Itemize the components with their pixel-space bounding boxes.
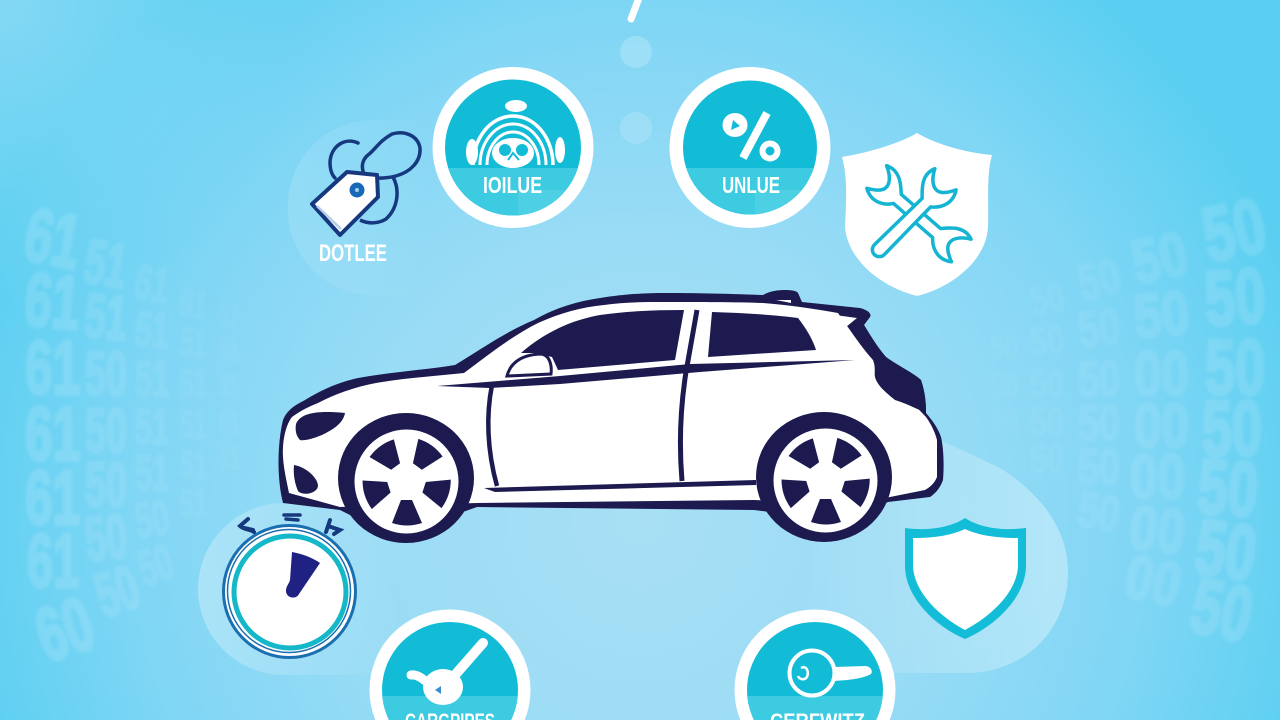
right number wall: 50: [1078, 351, 1120, 407]
left number wall: 61: [25, 456, 80, 541]
left number wall: 51: [79, 227, 132, 302]
left number wall: 50: [85, 451, 127, 520]
right number wall: 50: [990, 330, 1018, 366]
left number wall: 51: [218, 368, 240, 404]
right number wall: 00: [1130, 443, 1185, 512]
right number wall: 50: [1072, 247, 1126, 311]
car outer silhouette: [278, 290, 944, 520]
icon: price tag: [312, 133, 420, 235]
rear wheel: [756, 412, 892, 542]
left number wall: 61: [18, 192, 87, 286]
illustration: hatchback car: [278, 290, 944, 543]
right number wall: 50: [1131, 279, 1192, 352]
left number wall: 51: [180, 443, 207, 487]
badge: hammer tool: [370, 610, 530, 720]
panel: soft backdrop behind stopwatch: [198, 503, 458, 675]
badge: value ring: [432, 67, 594, 228]
right number wall: 00: [1134, 392, 1189, 461]
left number wall: 61: [176, 280, 211, 328]
left number wall: 50: [82, 502, 131, 575]
wrench one: [864, 164, 972, 265]
spoiler highlight: [835, 315, 857, 327]
connector dot lower: [620, 112, 652, 144]
wrench two: [861, 168, 959, 266]
left number wall: 51: [218, 405, 240, 441]
right number wall: 50: [1075, 298, 1123, 358]
front wheel: [338, 413, 474, 543]
left number wall: 51: [135, 399, 169, 455]
left number wall: 51: [178, 320, 209, 366]
icon: rings and face: [466, 100, 565, 168]
rear side window: [708, 312, 816, 357]
icon: stopwatch: [224, 515, 356, 658]
connector dot upper: [620, 36, 652, 68]
left number wall: 61: [214, 295, 244, 335]
label: value: IOILUE: [483, 172, 542, 198]
right number wall: 50: [990, 368, 1018, 404]
left number wall: 51: [135, 445, 169, 501]
icon: key: [790, 650, 872, 696]
tail light: [851, 325, 926, 413]
panel: soft backdrop behind shield: [780, 440, 1068, 673]
left number wall: 51: [218, 440, 240, 476]
left number wall: 51: [218, 332, 240, 368]
right number wall: 50: [1025, 274, 1069, 324]
headlight: [296, 412, 345, 440]
left number wall: 51: [135, 351, 169, 407]
front door edge: [488, 385, 497, 486]
right number wall: 00: [1134, 340, 1189, 409]
right number wall: 50: [990, 402, 1018, 438]
left number wall: 60: [25, 581, 104, 679]
left number wall: 50: [131, 489, 173, 549]
label: tag: DOTLEE: [319, 240, 387, 267]
right number wall: 50: [1030, 362, 1064, 406]
fog light: [294, 465, 318, 494]
right number wall: 50: [1030, 437, 1064, 481]
front side window: [521, 310, 684, 370]
belt line: [437, 360, 855, 388]
right number wall: 50: [1126, 219, 1194, 298]
left number wall: 61: [25, 392, 80, 477]
car white body: [283, 302, 937, 507]
mirror: [507, 354, 551, 376]
roof fin highlight: [776, 300, 791, 303]
left number wall: 50: [87, 553, 148, 631]
left number wall: 51: [133, 301, 171, 359]
right number wall: 50: [1028, 317, 1066, 365]
right number wall: 50: [1074, 481, 1124, 543]
left number wall: 50: [85, 340, 127, 409]
left number wall: 50: [85, 397, 127, 466]
left number wall: 61: [21, 257, 83, 346]
badge: percent: [670, 67, 830, 230]
left number wall: 51: [180, 362, 207, 406]
icon: tool: [411, 643, 483, 705]
left number wall: 51: [180, 482, 207, 526]
left number wall: 61: [25, 326, 80, 411]
icon: shield with crossed wrenches: [842, 133, 992, 296]
right number wall: 00: [1126, 493, 1188, 568]
panel: soft backdrop behind price tag: [288, 120, 528, 295]
icon: security shield: [905, 518, 1026, 639]
left number wall: 51: [82, 281, 130, 354]
right number wall: 50: [1078, 439, 1120, 495]
label: unlue: UNLUE: [722, 172, 780, 198]
right number wall: 50: [1030, 400, 1064, 444]
left number wall: [18, 192, 244, 679]
right number wall: 00: [1119, 542, 1187, 621]
right number wall: [990, 181, 1273, 659]
badge: key: [734, 610, 896, 720]
icon: percent sign: [722, 113, 778, 158]
sill line: [484, 480, 756, 492]
left number wall: 51: [180, 403, 207, 447]
door pillar: [680, 310, 697, 481]
left number wall: 61: [130, 253, 174, 315]
top connector mark: [631, 0, 639, 19]
right number wall: 50: [1078, 395, 1120, 451]
left number wall: 61: [27, 519, 79, 604]
left number wall: 50: [131, 533, 180, 597]
